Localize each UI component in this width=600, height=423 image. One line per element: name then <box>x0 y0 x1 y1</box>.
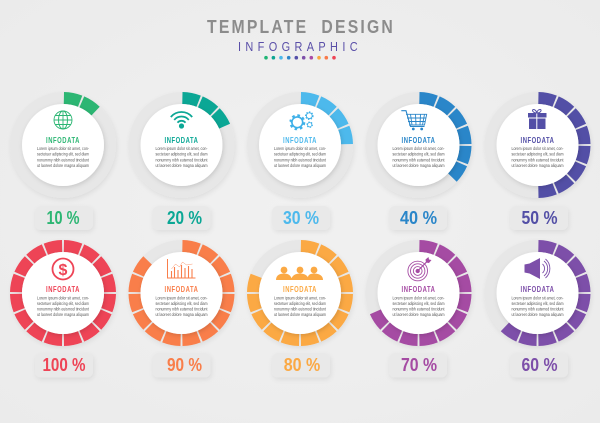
body text: nonummy nibh euismod tincidunt <box>37 157 89 163</box>
ring track <box>253 246 347 340</box>
progress ring <box>490 246 584 340</box>
body text: Lorem ipsum dolor sit amet, con- <box>392 296 445 302</box>
value: 10 % <box>46 207 80 228</box>
body text: ut laoreet dolore magna aliquam <box>392 163 445 169</box>
white disc <box>496 252 578 334</box>
progress ring <box>372 98 466 192</box>
icon: gift box <box>528 110 546 129</box>
value: 40 % <box>400 207 437 228</box>
body text: sectetuer adipiscing elit, sed diam <box>392 301 444 307</box>
heading: INFODATA <box>520 135 554 145</box>
ring track <box>134 246 228 340</box>
body text: Lorem ipsum dolor sit amet, con- <box>512 296 564 302</box>
panel: 70 percent <box>372 246 466 378</box>
body text: ut laoreet dolore magna aliquam <box>37 163 89 169</box>
body text: nonummy nibh euismod tincidunt <box>512 157 564 163</box>
body text <box>156 296 208 318</box>
body text: sectetuer adipiscing elit, sed diam <box>37 152 89 158</box>
body text <box>274 146 326 169</box>
subtitle: INFOGRAPHIC <box>238 40 362 54</box>
heading: INFODATA <box>164 284 198 294</box>
value pill <box>389 206 447 230</box>
icon: gears <box>291 112 313 129</box>
body text <box>37 296 89 318</box>
body text: ut laoreet dolore magna aliquam <box>512 312 564 318</box>
body text <box>512 296 564 318</box>
body text <box>512 146 564 169</box>
panel: 40 percent <box>372 98 466 230</box>
body text: sectetuer adipiscing elit, sed diam <box>156 301 208 307</box>
white disc <box>496 104 578 186</box>
ring track <box>134 98 228 192</box>
value: 90 % <box>167 354 202 375</box>
body text <box>392 296 445 318</box>
body text: sectetuer adipiscing elit, sed diam <box>512 301 564 307</box>
heading: INFODATA <box>520 284 554 294</box>
progress ring <box>16 98 110 192</box>
body text: sectetuer adipiscing elit, sed diam <box>512 152 564 158</box>
heading: INFODATA <box>46 284 80 294</box>
white disc <box>22 252 104 334</box>
ring track <box>16 246 110 340</box>
body text: sectetuer adipiscing elit, sed diam <box>274 301 326 307</box>
white disc <box>22 104 104 186</box>
panel: 10 percent <box>16 98 110 230</box>
body text: ut laoreet dolore magna aliquam <box>392 312 445 318</box>
progress ring <box>490 98 584 192</box>
value pill <box>152 353 210 378</box>
icon: shopping cart <box>401 111 427 130</box>
ring track <box>253 98 347 192</box>
body text: nonummy nibh euismod tincidunt <box>156 157 208 163</box>
heading: INFODATA <box>283 284 317 294</box>
body text <box>274 296 326 318</box>
body text: Lorem ipsum dolor sit amet, con- <box>37 296 89 302</box>
icon: people <box>276 267 323 280</box>
icon: speaker <box>524 258 550 279</box>
body text: sectetuer adipiscing elit, sed diam <box>156 152 208 158</box>
panel: 60 percent <box>490 246 584 378</box>
body text: ut laoreet dolore magna aliquam <box>37 312 89 318</box>
body text: ut laoreet dolore magna aliquam <box>156 312 208 318</box>
progress ring <box>253 98 347 192</box>
white disc <box>259 104 341 186</box>
body text: Lorem ipsum dolor sit amet, con- <box>512 146 564 152</box>
title: TEMPLATE DESIGN <box>207 17 395 37</box>
value: 30 % <box>283 207 319 228</box>
ring track <box>16 98 110 192</box>
value pill <box>389 353 447 378</box>
body text: sectetuer adipiscing elit, sed diam <box>37 301 89 307</box>
body text: nonummy nibh euismod tincidunt <box>392 157 445 163</box>
panel: 100 percent <box>16 246 110 378</box>
value: 80 % <box>284 354 320 375</box>
value: 50 % <box>522 207 558 228</box>
value pill <box>272 206 330 230</box>
panel: 90 percent <box>134 246 228 378</box>
body text: nonummy nibh euismod tincidunt <box>274 157 326 163</box>
value: 100 % <box>42 354 86 375</box>
heading: INFODATA <box>402 135 436 145</box>
value pill <box>510 206 568 230</box>
ring track <box>372 246 466 340</box>
body text: ut laoreet dolore magna aliquam <box>274 312 326 318</box>
body text: sectetuer adipiscing elit, sed diam <box>274 152 326 158</box>
value pill <box>152 206 210 230</box>
body text: nonummy nibh euismod tincidunt <box>274 307 326 313</box>
body text: ut laoreet dolore magna aliquam <box>512 163 564 169</box>
panel: 80 percent <box>253 246 347 378</box>
body text <box>392 146 445 169</box>
body text: Lorem ipsum dolor sit amet, con- <box>274 146 326 152</box>
panel: 50 percent <box>490 98 584 230</box>
body text: sectetuer adipiscing elit, sed diam <box>392 152 444 158</box>
ring track <box>490 246 584 340</box>
body text: ut laoreet dolore magna aliquam <box>156 163 208 169</box>
value pill <box>35 353 93 378</box>
white disc <box>378 252 460 334</box>
body text: nonummy nibh euismod tincidunt <box>392 307 445 313</box>
body text: ut laoreet dolore magna aliquam <box>274 163 326 169</box>
white disc <box>259 252 341 334</box>
progress ring <box>253 246 347 340</box>
body text <box>156 146 208 169</box>
body text: Lorem ipsum dolor sit amet, con- <box>156 146 208 152</box>
body text: nonummy nibh euismod tincidunt <box>512 307 564 313</box>
icon: bar chart <box>168 259 196 278</box>
value pill <box>272 353 330 378</box>
panel: 30 percent <box>253 98 347 230</box>
progress ring <box>16 246 110 340</box>
body text: nonummy nibh euismod tincidunt <box>37 307 89 313</box>
white disc <box>140 252 222 334</box>
value pill <box>35 206 93 230</box>
body text: Lorem ipsum dolor sit amet, con- <box>37 146 89 152</box>
heading: INFODATA <box>46 135 80 145</box>
icon: dollar coin: $ <box>59 262 68 279</box>
body text: nonummy nibh euismod tincidunt <box>156 307 208 313</box>
value: 70 % <box>401 354 437 375</box>
panel: 20 percent <box>134 98 228 230</box>
heading: INFODATA <box>402 284 436 294</box>
icon: target <box>408 257 432 281</box>
value pill <box>510 353 568 378</box>
heading: INFODATA <box>283 135 317 145</box>
value: 20 % <box>167 207 202 228</box>
colour dots <box>264 56 336 60</box>
value: 60 % <box>522 354 558 375</box>
icon: globe <box>54 111 72 129</box>
heading: INFODATA <box>164 135 198 145</box>
white disc <box>378 104 460 186</box>
progress ring <box>134 98 228 192</box>
body text: Lorem ipsum dolor sit amet, con- <box>392 146 445 152</box>
ring track <box>372 98 466 192</box>
body text <box>37 146 89 169</box>
icon: wifi <box>171 112 192 129</box>
progress ring <box>134 246 228 340</box>
ring track <box>490 98 584 192</box>
white disc <box>140 104 222 186</box>
body text: Lorem ipsum dolor sit amet, con- <box>274 296 326 302</box>
body text: Lorem ipsum dolor sit amet, con- <box>156 296 208 302</box>
progress ring <box>372 246 466 340</box>
